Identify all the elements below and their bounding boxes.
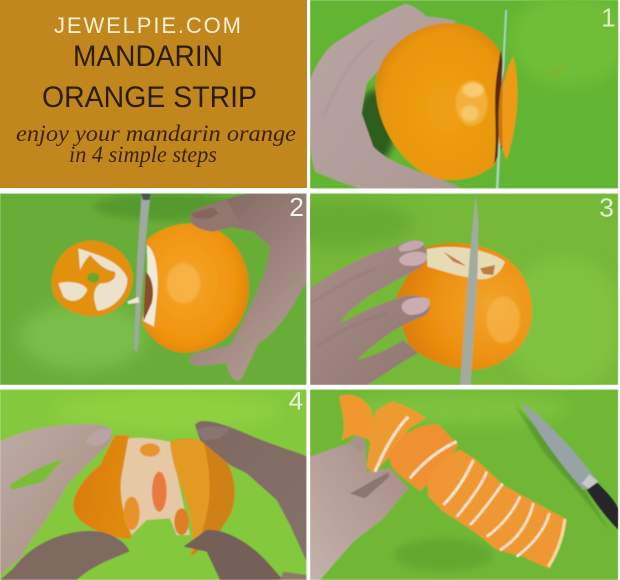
tagline line 2: in 4 simple steps — [69, 142, 217, 167]
icon: orange — [375, 23, 503, 180]
icon: orange flesh — [121, 438, 190, 535]
panel: step 3 photo — [310, 193, 618, 385]
step number 3: 3 — [599, 193, 614, 223]
icon: hand — [189, 193, 307, 381]
site name: JEWELPIE.COM — [54, 13, 241, 38]
panel: title — [0, 0, 307, 188]
icon: knife — [134, 193, 151, 352]
step number 2: 2 — [289, 192, 304, 222]
icon: cut peel — [52, 241, 133, 316]
icon: cut slice — [500, 57, 517, 160]
panel: step 1 photo — [310, 0, 620, 189]
icon: right hand — [195, 421, 307, 562]
icon: orange segments strip — [339, 395, 565, 569]
icon: hand — [310, 435, 408, 580]
step number 1: 1 — [601, 3, 616, 33]
panel: step 5 photo — [310, 389, 618, 580]
icon: hand — [310, 4, 462, 189]
step number 4: 4 — [289, 388, 303, 416]
icon: paring knife — [521, 402, 618, 530]
heading: orange strip: ORANGE STRIP — [42, 81, 257, 114]
icon: hand — [310, 240, 430, 385]
icon: left hand — [0, 424, 112, 575]
fingertip over orange — [190, 200, 240, 232]
icon: orange — [142, 224, 249, 353]
icon: knife — [496, 10, 507, 189]
icon: orange — [397, 243, 532, 370]
panel: step 4 photo — [0, 388, 307, 580]
heading: mandarin: MANDARIN — [73, 40, 223, 73]
icon: knife — [460, 194, 478, 385]
tagline line 1: enjoy your mandarin orange — [16, 121, 296, 146]
icon: orange left half — [73, 435, 132, 539]
panel: step 2 photo — [0, 192, 307, 385]
icon: orange right half — [170, 439, 235, 557]
